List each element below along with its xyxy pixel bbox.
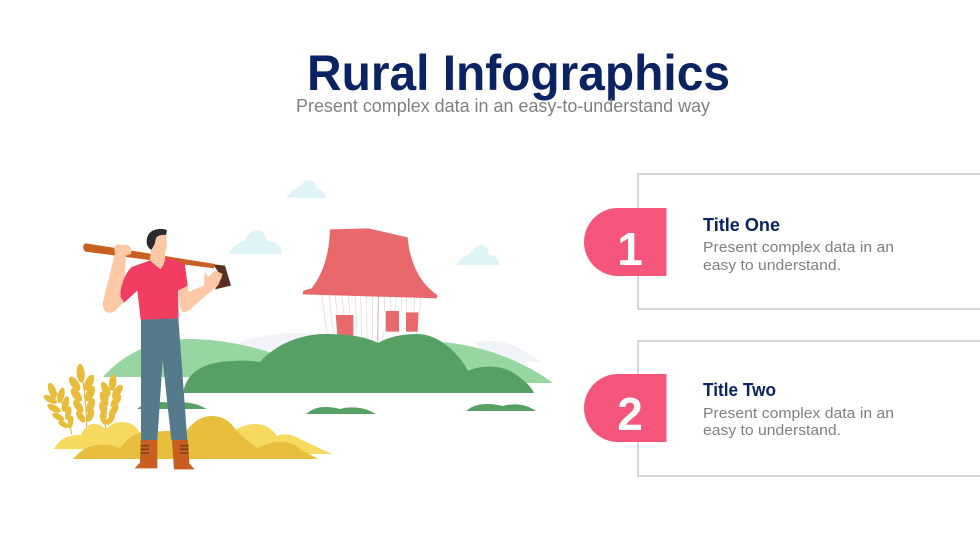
house roof (303, 228, 437, 298)
number 2: 2 (617, 388, 643, 440)
wall planks (322, 295, 421, 341)
illustration: rural scene (42, 180, 553, 469)
hair (147, 229, 167, 250)
light yellow hills (54, 422, 332, 454)
number tab (584, 374, 666, 442)
dark yellow hills (73, 416, 318, 459)
shirt (120, 257, 188, 320)
panel: title one (584, 174, 980, 309)
boots (135, 440, 195, 469)
house windows (386, 311, 418, 332)
card outline (638, 174, 980, 309)
face (152, 233, 167, 253)
hoe handle (83, 243, 215, 268)
body text: Present complex data in an (703, 239, 894, 256)
body text: easy to understand. (703, 257, 841, 274)
body text: Present complex data in an (703, 405, 894, 422)
trousers (141, 318, 187, 440)
light green hills (103, 339, 553, 383)
dark green hills (183, 334, 534, 393)
icon: wheat (42, 364, 125, 434)
icon: clouds (228, 180, 499, 265)
wheat stems (52, 367, 113, 434)
heading: Title One (703, 215, 780, 235)
wall centre post (376, 295, 380, 343)
hand on handle (114, 244, 131, 256)
neck (149, 247, 167, 271)
house door (336, 315, 353, 338)
card outline (638, 341, 980, 476)
number 1: 1 (617, 223, 643, 275)
hoe head (213, 264, 231, 289)
house wall (322, 295, 421, 343)
right arm (178, 270, 223, 312)
body text: easy to understand. (703, 422, 841, 439)
small bushes (137, 402, 536, 414)
left arm (103, 253, 126, 313)
panel: title two (584, 341, 980, 476)
title: Rural Infographics (307, 45, 730, 101)
farmer with hoe (83, 229, 231, 469)
subtitle: Present complex data in an easy-to-understand way (296, 96, 710, 116)
pale background hills (240, 333, 542, 362)
number tab (584, 208, 666, 276)
heading: Title Two (703, 380, 776, 400)
wheat leaves (42, 364, 125, 429)
boot laces (141, 446, 189, 453)
house (303, 228, 437, 343)
